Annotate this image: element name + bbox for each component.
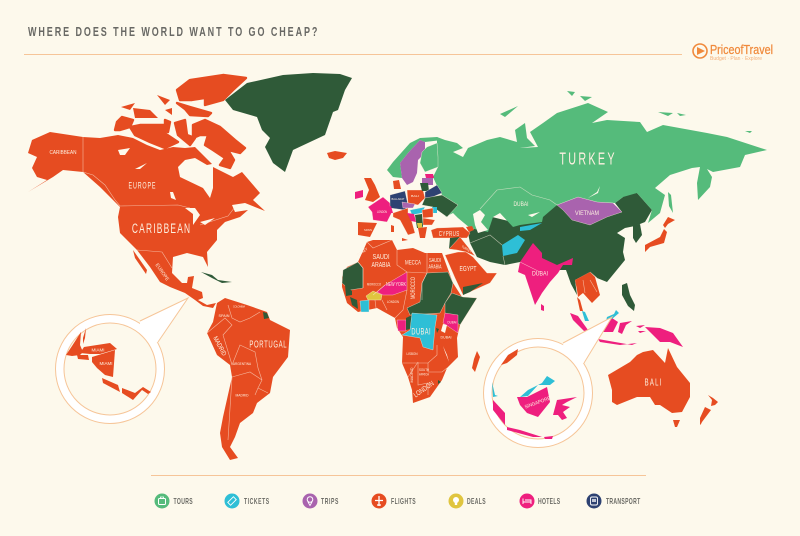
title: WHERE DOES THE WORLD WANT TO GO CHEAP? xyxy=(28,26,318,39)
map: New Zealand xyxy=(700,395,718,425)
country labels: CARIBBEAN xyxy=(50,150,77,156)
map: Philippines xyxy=(622,283,635,311)
country labels: PORTUGAL xyxy=(249,339,287,350)
country labels: DUBAI xyxy=(514,202,529,208)
map: Middle East xyxy=(431,226,497,295)
country labels: MOROCCO xyxy=(367,282,381,286)
legend: tours: TOURS xyxy=(174,498,193,506)
country labels: TURKEY xyxy=(559,150,615,169)
map: Europe countries xyxy=(355,174,458,241)
country labels: SAUDI xyxy=(372,254,390,261)
country labels: LISBON xyxy=(406,351,418,356)
map: South America xyxy=(207,298,290,460)
inset: Central America magnifier: MIAMI xyxy=(92,348,104,352)
country labels: MADRID xyxy=(236,392,249,398)
country labels: LONDON xyxy=(387,299,399,304)
country labels: NEW YORK xyxy=(386,282,406,288)
legend: flights xyxy=(372,494,416,508)
country labels: MADRID xyxy=(211,335,227,357)
map: North America xyxy=(28,75,265,308)
map: Japan xyxy=(645,217,675,252)
inset: Southeast Asia magnifier: SINGAPORE xyxy=(524,395,552,410)
map: Eurasia dark region xyxy=(468,193,652,295)
country labels: ARABIA xyxy=(372,262,391,269)
legend: tickets: TICKETS xyxy=(244,498,269,506)
map: Afghanistan xyxy=(502,235,525,256)
country labels: BALI xyxy=(411,194,419,198)
country labels: VIETNAM xyxy=(575,211,599,217)
map: Greenland xyxy=(225,73,352,172)
map: Tasmania xyxy=(673,420,680,427)
country labels: TURKEY xyxy=(461,245,473,254)
country labels: EUROPE xyxy=(154,263,170,283)
logo: Price of Travel: PriceofTravel xyxy=(710,43,773,57)
map: India xyxy=(518,243,573,311)
country labels: MOROCCO xyxy=(411,277,417,299)
country labels: BALI xyxy=(645,377,661,388)
country labels: CYPRUS xyxy=(439,230,459,238)
country labels: SAUDI xyxy=(429,258,441,264)
map: Africa xyxy=(342,240,480,403)
country labels: COLOMBIA xyxy=(233,304,245,308)
inset: Central America magnifier: MIAMI xyxy=(100,361,112,366)
country labels: ARABIA xyxy=(428,264,442,270)
inset: Central America magnifier xyxy=(56,298,188,424)
map: Iceland xyxy=(327,151,347,160)
country labels xyxy=(50,150,661,399)
country labels: MADRID xyxy=(409,367,414,382)
country labels: EUROPE xyxy=(128,180,156,191)
country labels: LONDON xyxy=(413,380,436,399)
map: Korea xyxy=(633,224,642,243)
legend: flights: FLIGHTS xyxy=(391,498,416,506)
map: Southeast Asia xyxy=(570,272,683,347)
legend divider xyxy=(151,474,646,476)
country labels: DUBAI xyxy=(411,326,431,337)
map: Russia and Kazakhstan xyxy=(433,91,767,233)
country labels: MECCA xyxy=(405,260,421,266)
logo: Price of Travel xyxy=(693,43,773,62)
country labels: CARIBBEAN xyxy=(132,222,190,237)
country labels: BALLARAT xyxy=(392,197,405,201)
country labels: ARGENTINA xyxy=(233,362,252,366)
legend: deals xyxy=(448,494,486,508)
legend: hotels: HOTELS xyxy=(538,498,560,506)
map: Kyrgyzstan xyxy=(520,223,542,231)
legend: tours xyxy=(154,494,193,508)
country labels: SOUTH xyxy=(419,368,430,372)
inset: Southeast Asia magnifier xyxy=(484,317,612,448)
country labels: DUBAI xyxy=(440,336,452,340)
legend: trips: TRIPS xyxy=(321,498,339,506)
legend: deals: DEALS xyxy=(467,498,486,506)
country labels: SPAIN xyxy=(364,228,372,232)
country labels: LONDON xyxy=(377,210,387,214)
country labels: DUBAI xyxy=(532,272,548,278)
map: Scandinavia xyxy=(387,137,442,185)
country labels: EGYPT xyxy=(460,264,477,273)
map: Mongolia xyxy=(557,197,622,225)
map: Australia xyxy=(608,348,690,413)
logo: Price of Travel: Budget · Plan · Explore xyxy=(710,56,762,62)
legend: tickets xyxy=(224,494,269,508)
country labels: DUBAI xyxy=(448,320,457,324)
legend: transport xyxy=(586,494,641,508)
legend: trips xyxy=(302,494,339,508)
legend: hotels xyxy=(520,494,560,508)
map: Caribbean islands xyxy=(201,272,232,283)
legend: transport: TRANSPORT xyxy=(606,498,641,506)
country labels: SPAIN xyxy=(218,313,230,318)
country labels: AFRICA xyxy=(419,372,430,376)
country labels: TURKEY xyxy=(356,246,369,257)
